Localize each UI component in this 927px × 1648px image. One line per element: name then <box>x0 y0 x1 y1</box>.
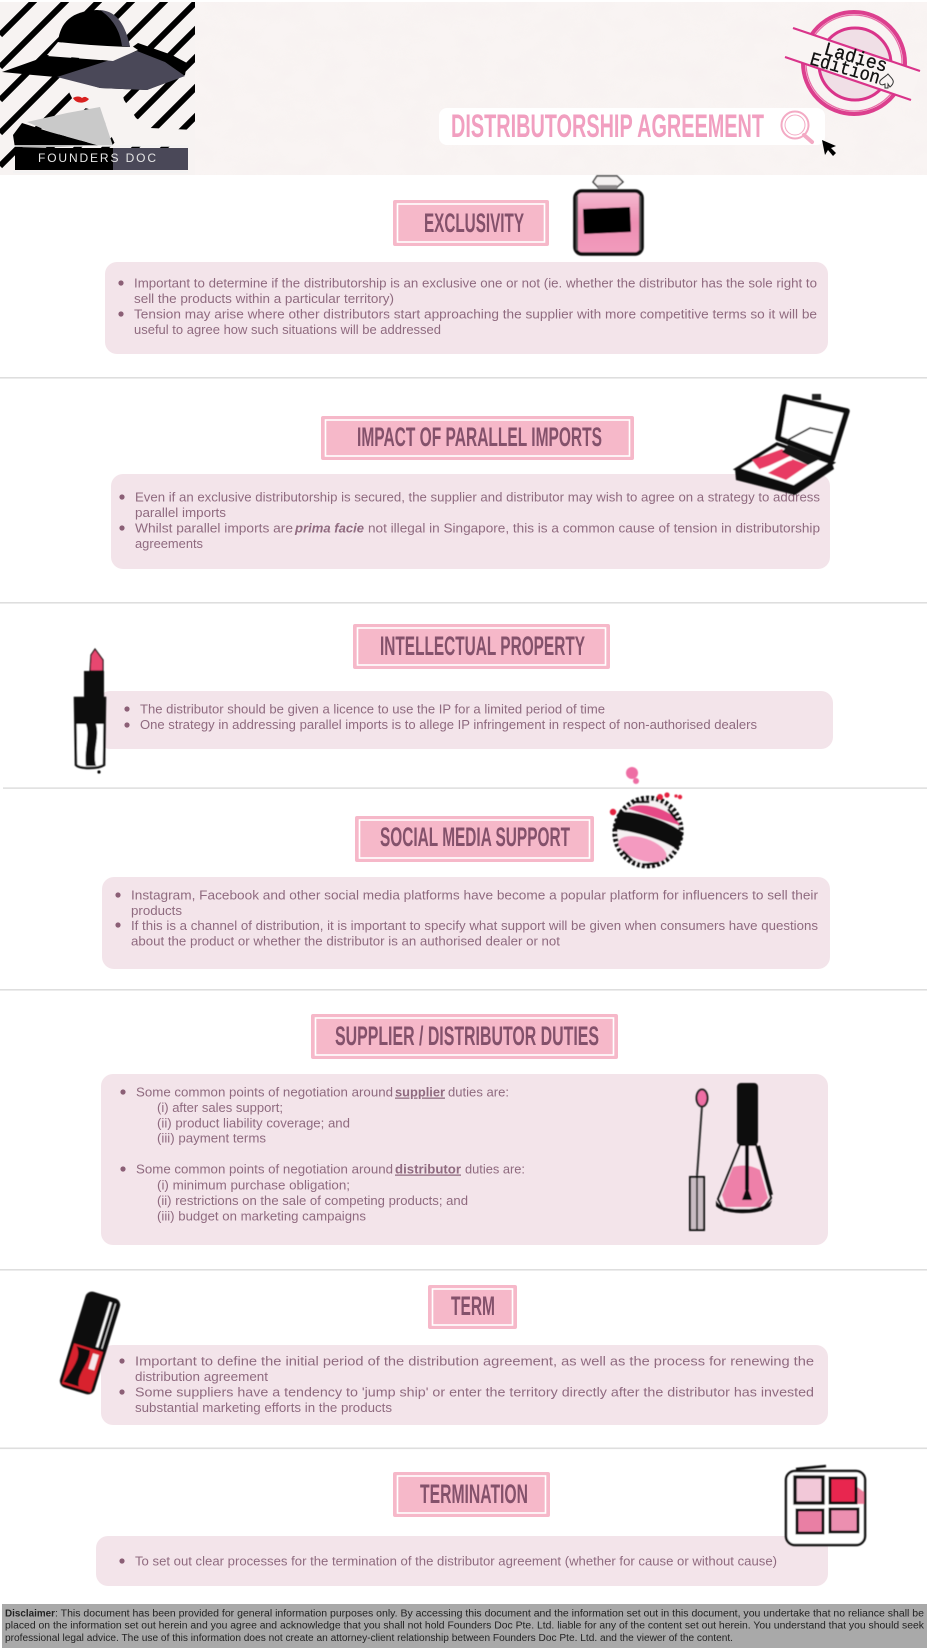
logo text: FOUNDERS DOC <box>38 151 156 165</box>
text block: One strategy in addressing parallel imports is to allege IP infringement in respect of non-authorised dealers <box>140 718 757 732</box>
text block: The distributor should be given a licence to use the IP for a limited period of time <box>140 702 605 716</box>
text block: supplier duties: supplier <box>395 1086 445 1100</box>
bullets <box>120 1089 126 1172</box>
text block: Important to determine if the distributorship is an exclusive one or not (ie. whether the distributor has the sole right to <box>134 276 817 290</box>
bullets <box>119 494 125 531</box>
text block: Important to define the initial period of the distribution agreement, as well as the process for renewing the <box>135 1354 814 1368</box>
disclaimer <box>2 1604 927 1648</box>
heading: exclusivity <box>393 200 549 246</box>
bullets <box>118 280 124 317</box>
text block: supplier duties: duties are: <box>448 1086 509 1100</box>
text block: supplier duties <box>136 1086 509 1146</box>
text block: not illegal in Singapore, this is a common cause of tension in distributorship <box>368 522 820 536</box>
disclaimer: Disclaimer <box>5 1608 55 1620</box>
text block: distributor duties: duties are: <box>465 1162 525 1176</box>
icon: blush palette <box>786 1466 865 1545</box>
heading: termination <box>393 1472 550 1517</box>
text block <box>135 1354 814 1415</box>
text block: Whilst parallel imports are <box>135 522 293 536</box>
panel: termination <box>96 1536 828 1586</box>
section: termination <box>96 1466 865 1586</box>
disclaimer: : This document has been provided for general information purposes only. By accessing this document and the information set out in this document, you undertake that no reliance shall be <box>55 1608 925 1620</box>
section: exclusivity <box>105 176 828 354</box>
text block: about the product or whether the distributor is an authorised dealer or not <box>131 934 561 948</box>
section: intellectual property <box>75 624 833 774</box>
heading: exclusivity: EXCLUSIVITY <box>424 208 524 238</box>
disclaimer: placed on the information set out herein and you agree and acknowledge that you shall not hold Founders Doc Pte. Ltd. liable for any of the content set out herein. You understand that you should seek <box>5 1620 924 1632</box>
section: supplier / distributor duties <box>101 1014 828 1245</box>
icon: lipstick <box>75 649 105 774</box>
icon: nail polish bottle <box>716 1083 772 1213</box>
icon: lip gloss wand <box>690 1090 708 1230</box>
heading: duties <box>311 1014 618 1059</box>
heading: duties: SUPPLIER / DISTRIBUTOR DUTIES <box>335 1021 599 1051</box>
text block: distributor duties: distributor <box>395 1162 461 1176</box>
illustration: woman in hat <box>0 2 195 170</box>
text block: substantial marketing efforts in the products <box>135 1401 392 1415</box>
icon: nail polish <box>58 1290 122 1396</box>
text block: parallel imports <box>135 506 226 520</box>
panel: exclusivity <box>105 262 828 354</box>
heading: social media support <box>355 816 594 862</box>
panel: parallel imports <box>111 474 830 569</box>
section: impact of parallel imports <box>111 394 847 569</box>
heading: term <box>428 1285 517 1329</box>
panel: duties <box>101 1074 828 1245</box>
bullet <box>119 1558 125 1564</box>
text block: If this is a channel of distribution, it is important to specify what support will be given when consumers have questions <box>131 919 818 933</box>
heading: parallel imports <box>321 416 634 460</box>
heading: termination: TERMINATION <box>420 1479 528 1509</box>
heading: term: TERM <box>451 1291 495 1321</box>
text block: Instagram, Facebook and other social media platforms have become a popular platform for influencers to sell their <box>131 888 818 902</box>
icon: magnifier <box>782 112 812 142</box>
text block: distributor duties: (iii) budget on marketing campaigns <box>157 1210 366 1224</box>
heading: intellectual property <box>353 624 610 669</box>
text block <box>131 888 818 948</box>
header banner <box>0 2 927 175</box>
section: term <box>58 1285 828 1425</box>
panel: social media support <box>102 877 830 969</box>
stamp: ladies edition: Ladies <box>821 39 890 78</box>
text block <box>135 490 820 551</box>
text block: distributor duties <box>136 1162 525 1224</box>
panel: intellectual property <box>98 691 833 749</box>
text block: sell the products within a particular territory) <box>134 292 394 306</box>
heading: parallel imports: IMPACT OF PARALLEL IMPORTS <box>357 422 602 452</box>
text block: prima facie <box>294 522 364 536</box>
panel: term <box>101 1345 828 1425</box>
text block: Some suppliers have a tendency to 'jump ship' or enter the territory directly after the distributor has invested <box>135 1386 814 1400</box>
section: social media support <box>102 767 830 969</box>
icon: powder puff <box>605 767 691 875</box>
bullets <box>124 706 130 728</box>
stamp: ladies edition <box>785 12 920 114</box>
heading: social media support: SOCIAL MEDIA SUPPORT <box>380 822 570 852</box>
text block: supplier duties: (ii) product liability coverage; and <box>157 1116 350 1130</box>
heading: intellectual property: INTELLECTUAL PROPERTY <box>380 631 585 661</box>
text block: distributor duties: (ii) restrictions on the sale of competing products; and <box>157 1194 468 1208</box>
text block: Tension may arise where other distributors start approaching the supplier with more competitive terms so it will be <box>134 308 817 322</box>
icon: cursor <box>822 140 836 156</box>
stamp: ladies edition: Edition <box>807 49 883 90</box>
text block: distributor duties: (i) minimum purchase obligation; <box>157 1178 350 1192</box>
icon: perfume bottle <box>575 176 642 254</box>
text block: supplier duties: Some common points of negotiation around <box>136 1086 393 1100</box>
text block: agreements <box>135 537 203 551</box>
bullets <box>115 892 121 928</box>
icon: eyeshadow compact <box>735 394 847 495</box>
text block: To set out clear processes for the termination of the distributor agreement (whether for cause or without cause) <box>135 1554 777 1568</box>
disclaimer: professional legal advice. The use of this information does not create an attorney-client relationship between Founders Doc Pte. Ltd. and the viewer of the content. <box>5 1633 733 1644</box>
text block <box>134 276 817 337</box>
text block: products <box>131 904 182 918</box>
text block: supplier duties: (i) after sales support; <box>157 1101 283 1115</box>
text block <box>140 702 757 732</box>
text block: distributor duties: Some common points of negotiation around <box>136 1162 393 1176</box>
bullets <box>119 1358 125 1395</box>
text block: supplier duties: (iii) payment terms <box>157 1132 266 1146</box>
text block: Even if an exclusive distributorship is secured, the supplier and distributor may wish to agree on a strategy to address <box>135 490 820 504</box>
text block: distribution agreement <box>135 1370 269 1384</box>
text block: useful to agree how such situations will be addressed <box>134 323 441 337</box>
